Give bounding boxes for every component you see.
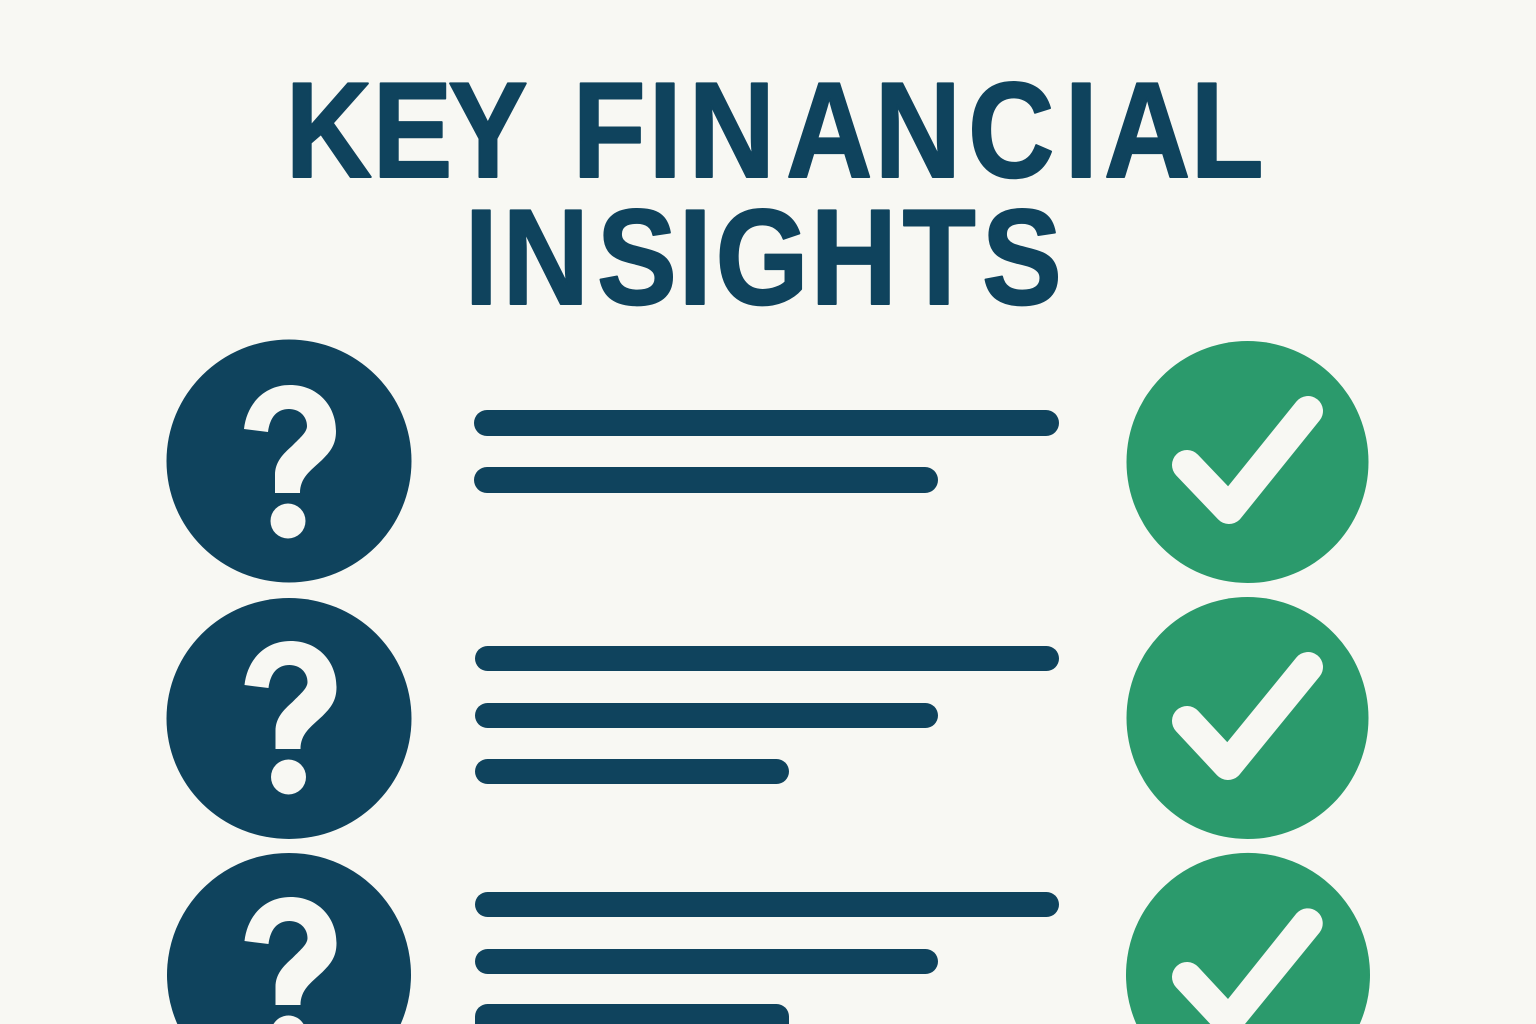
- row 2: [166, 597, 1368, 839]
- icon: check mark 3: [1126, 853, 1370, 1024]
- title: [286, 55, 1264, 334]
- text placeholder lines 2: [475, 646, 1059, 784]
- title: INSIGHTS: [465, 182, 1062, 334]
- icon: check mark 1: [1126, 341, 1368, 583]
- text placeholder lines 1: [474, 410, 1059, 493]
- icon: check mark 2: [1126, 597, 1368, 839]
- row 1: [166, 340, 1368, 583]
- row 3: [167, 853, 1370, 1024]
- icon: question mark 1: [166, 340, 412, 582]
- title: KEY FINANCIAL: [286, 55, 1264, 207]
- icon: question mark 3: [167, 853, 411, 1024]
- icon: question mark 2: [166, 598, 412, 839]
- text placeholder lines 3: [475, 892, 1059, 1024]
